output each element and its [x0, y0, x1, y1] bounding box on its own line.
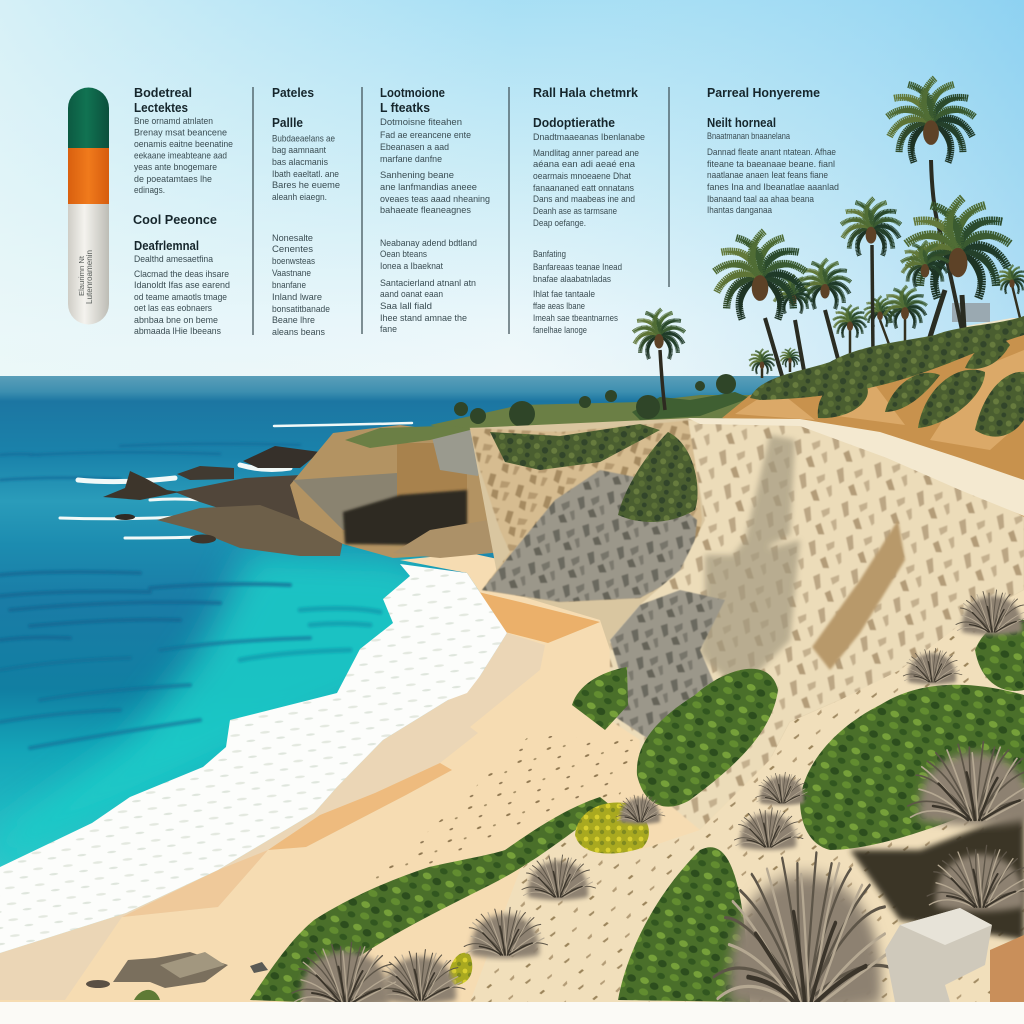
body copy: Fad ae ereancene ente	[380, 130, 471, 141]
long low hedge	[250, 797, 610, 1002]
palm grove on ridge	[713, 78, 1024, 386]
palm trio left	[713, 231, 852, 386]
central bush	[637, 669, 778, 807]
body copy	[707, 131, 839, 216]
body copy lower: bnafae alaabatnladas	[533, 274, 611, 285]
body copy: Deanh ase as tarmsane	[533, 206, 617, 217]
body copy: Bnaatmanan bnaanelana	[707, 131, 791, 142]
body copy: bas alacmanis	[272, 157, 328, 168]
body copy lower: bonsatitbanade	[272, 304, 330, 315]
dry grass tufts	[292, 590, 1024, 1015]
palm cluster right	[900, 198, 1012, 370]
capsule label: Elaurimn Nt	[79, 256, 86, 296]
body copy lower	[134, 254, 230, 337]
body copy	[272, 134, 340, 203]
body copy lower: Ihlat fae tantaale	[533, 289, 595, 300]
body copy lower: Neabanay adend bdtland	[380, 238, 477, 249]
body copy: aéana ean adi aeaé ena	[533, 159, 636, 170]
yellow flowering bush	[575, 803, 649, 854]
cliff cavities	[812, 520, 905, 670]
mid palm	[840, 198, 902, 356]
body copy lower	[380, 238, 477, 335]
bottom paper strip	[0, 1002, 1024, 1024]
distant headland and trees	[430, 374, 760, 430]
body copy: ane lanfmandias aneee	[380, 182, 477, 193]
text column 3	[380, 85, 490, 335]
body copy: oveaes teas aaad nheaning	[380, 194, 490, 205]
body copy lower: oet las eas eobnaers	[134, 303, 212, 314]
sea	[0, 376, 1024, 1002]
sky background	[0, 0, 1024, 380]
icon: capsule gauge	[68, 88, 109, 324]
body copy: naatlanae anaen Ieat feans fiane	[707, 170, 828, 181]
body copy lower: Beane lhre	[272, 315, 315, 326]
body copy lower	[272, 233, 330, 338]
body copy lower: Ihee stand amnae the	[380, 313, 467, 324]
body copy lower: abnbaa bne on beme	[134, 315, 218, 326]
body copy lower: boenwsteas	[272, 256, 315, 267]
body copy lower: Nonesalte	[272, 233, 313, 244]
body copy: Deap oefange.	[533, 218, 586, 229]
bottom right bush	[618, 847, 750, 1002]
body copy lower: Clacmad the deas ihsare	[134, 269, 229, 280]
detached rock west	[103, 471, 180, 500]
body copy lower: aand oanat eaan	[380, 289, 443, 300]
rock base	[157, 505, 343, 556]
dark ground under right bush	[850, 810, 1024, 940]
body copy lower: bnanfane	[272, 280, 306, 291]
body copy lower: Vaastnane	[272, 268, 311, 279]
body copy lower: Imeah sae tbeantnarnes	[533, 313, 618, 324]
heading sub: Deafrlemnal	[134, 239, 199, 253]
subheading: Pallle	[272, 115, 303, 130]
heading: Rall Hala chetmrk	[533, 85, 639, 100]
cliff top path	[688, 418, 1024, 516]
cliff backing	[470, 418, 1024, 760]
body copy: yeas ante bnogemare	[134, 162, 217, 173]
foreground slope	[360, 590, 1024, 1002]
body copy: de poeatamtaes lhe	[134, 174, 212, 185]
wet sand band	[0, 633, 545, 1000]
tall palm top right	[886, 78, 976, 360]
body copy lower: od teame amaotls tmage	[134, 292, 227, 303]
text column 2	[272, 85, 340, 338]
west cliff	[290, 425, 520, 558]
column dividers	[253, 87, 669, 335]
body copy: Bares he eueme	[272, 180, 340, 191]
body copy lower: Banfating	[533, 249, 566, 260]
text column 5	[707, 85, 839, 216]
grey lower rock	[605, 590, 725, 740]
text column 1	[133, 85, 233, 337]
body copy: oenamis eaitne beenatine	[134, 139, 233, 150]
heading line two: L fteatks	[380, 100, 430, 115]
pebble scatter on beach	[360, 735, 640, 885]
body copy lower: Oean bteans	[380, 249, 427, 260]
white surf streaks around rocks	[60, 423, 412, 538]
detached rock east	[243, 446, 320, 468]
body copy: Ibanaand taal aa ahaa beana	[707, 194, 815, 205]
big sandstone cliff	[605, 418, 1024, 830]
body copy lower: Inland lware	[272, 292, 322, 303]
body copy lower	[533, 249, 622, 336]
body copy: Dotmoisne fiteahen	[380, 117, 462, 128]
body copy: Ebeanasen a aad	[380, 142, 449, 153]
turquoise shallows	[0, 550, 470, 870]
body copy lower: abmaada lHie Ibeeans	[134, 326, 221, 337]
body copy: Ihantas danganaa	[707, 205, 773, 216]
body copy lower: ffae aeas Ibane	[533, 301, 585, 312]
subheading: Dodoptierathe	[533, 115, 615, 130]
body copy: bahaeate fleaneagnes	[380, 205, 471, 216]
body copy lower: fanelhae Ianoge	[533, 325, 587, 336]
body copy lower: Dealthd amesaetfina	[134, 254, 214, 265]
body copy: fiteane ta baeanaae beane. fianl	[707, 159, 835, 170]
body copy lower: aleans beans	[272, 327, 325, 338]
body copy	[533, 132, 645, 229]
body copy	[134, 116, 233, 196]
body copy: fanaananed eatt onnatans	[533, 183, 634, 194]
body copy: Ibath eaeltatl. ane	[272, 169, 339, 180]
body copy: oearmais mnoeaene Dhat	[533, 171, 631, 182]
body copy lower: Banfareaas teanae Inead	[533, 262, 622, 273]
surf foam	[0, 564, 507, 953]
heading: Lootmoione	[380, 85, 445, 100]
wave streaks	[0, 444, 380, 748]
body copy lower: Cenentes	[272, 244, 313, 255]
heading: Parreal Honyereme	[707, 85, 820, 100]
subheading: Neilt horneal	[707, 115, 776, 130]
text column 4	[533, 85, 645, 336]
body copy: fanes Ina and Ibeanatlae aaanlad	[707, 182, 839, 193]
building on ridge	[952, 303, 1024, 360]
body copy: Dans and maabeas ine and	[533, 194, 635, 205]
heading line two: Lectektes	[134, 100, 188, 115]
beach sand	[0, 553, 1024, 1002]
heading: Bodetreal	[134, 85, 192, 100]
body copy: marfane danfne	[380, 154, 442, 165]
body copy: aleanh eiaegn.	[272, 192, 327, 203]
bushes on the slope	[250, 619, 1024, 1002]
body copy: Dnadtmaaeanas Ibenlanabe	[533, 132, 645, 143]
body copy: Bne ornamd atnlaten	[134, 116, 213, 127]
big right bush	[800, 685, 1024, 850]
capsule label	[79, 250, 94, 304]
body copy: Brenay msat beancene	[134, 128, 227, 138]
cliff bush	[618, 432, 698, 522]
small cliff bush	[572, 667, 628, 730]
body copy: Mandlitag anner paread ane	[533, 148, 639, 159]
body copy	[380, 117, 490, 216]
foreground rocks	[86, 908, 1024, 1002]
body copy lower: Santacierland atnanl atn	[380, 278, 476, 289]
body copy lower: Ionea a Ibaeknat	[380, 261, 443, 272]
body copy: bag aamnaant	[272, 145, 326, 156]
body copy: Dannad fleate anant ntatean. Afhae	[707, 147, 836, 158]
body copy lower: fane	[380, 324, 397, 335]
body copy: Bubdaeaelans ae	[272, 134, 335, 144]
central cliff	[470, 420, 702, 602]
palm tree small centre	[632, 309, 686, 410]
rock shelf	[175, 475, 360, 525]
orange wet patches	[268, 763, 452, 850]
hillside above cliff	[722, 316, 1024, 525]
left rocky headland	[103, 446, 360, 556]
body copy lower: Idanoldt Ifas ase earend	[134, 280, 230, 291]
heading: Pateles	[272, 85, 314, 100]
small background palms	[749, 265, 1024, 378]
heading coal: Cool Peeonce	[133, 212, 217, 227]
body copy: eekaane imeabteane aad	[134, 150, 227, 162]
capsule label: Lutenroamenin	[85, 250, 94, 304]
body copy: edinags.	[134, 185, 165, 196]
body copy lower: Saa lall fiald	[380, 301, 432, 312]
rock mid	[177, 466, 234, 480]
body copy: Sanhening beane	[380, 170, 454, 181]
